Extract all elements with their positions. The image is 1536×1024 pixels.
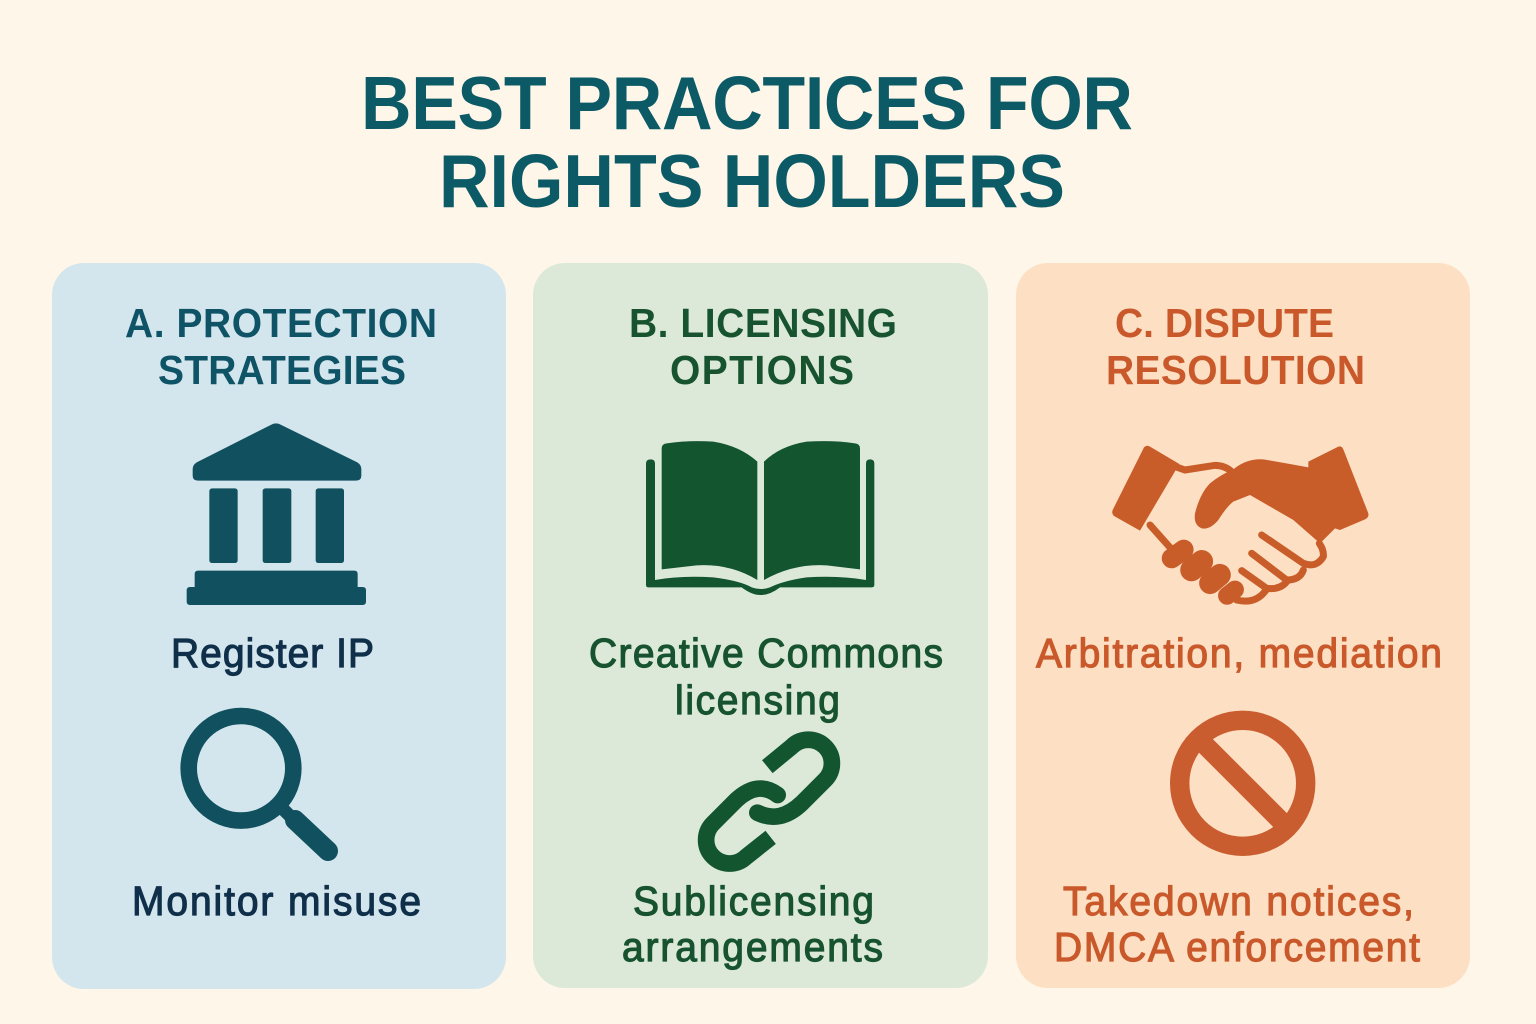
text: creative commons licensing [589, 631, 943, 723]
text: arbitration, mediation: Arbitration, mediation [1036, 631, 1442, 676]
panel: protection strategies [52, 263, 506, 989]
panel: dispute resolution [1016, 263, 1470, 988]
icon: magnifying glass [189, 716, 328, 851]
title [361, 62, 1133, 224]
text: monitor misuse: Monitor misuse [132, 879, 421, 924]
heading: dispute resolution: C. DISPUTE [1115, 301, 1334, 346]
icon: institution building [187, 423, 366, 605]
text: creative commons licensing: Creative Commons [589, 631, 943, 676]
text: creative commons licensing: licensing [675, 678, 840, 723]
heading: dispute resolution [1106, 301, 1365, 393]
heading: dispute resolution: RESOLUTION [1106, 348, 1365, 393]
text: sublicensing arrangements: arrangements [622, 925, 883, 970]
heading: protection strategies: STRATEGIES [158, 348, 406, 393]
icon: handshake [1112, 446, 1369, 608]
title: BEST PRACTICES FOR [361, 62, 1133, 146]
heading: licensing options: B. LICENSING [629, 301, 897, 346]
text: sublicensing arrangements [622, 879, 883, 970]
panel: licensing options [533, 263, 988, 988]
icon: prohibited sign [1180, 720, 1306, 846]
text: sublicensing arrangements: Sublicensing [633, 879, 874, 924]
icon: open book [646, 441, 874, 595]
text: takedown notices, DMCA enforcement [1054, 879, 1420, 970]
text: takedown notices, DMCA enforcement: DMCA enforcement [1054, 925, 1420, 970]
heading: licensing options [629, 301, 897, 393]
heading: protection strategies [125, 301, 437, 393]
heading: protection strategies: A. PROTECTION [125, 301, 437, 346]
heading: licensing options: OPTIONS [670, 348, 854, 393]
text: takedown notices, DMCA enforcement: Takedown notices, [1063, 879, 1414, 924]
icon: chain link [706, 740, 832, 864]
text: register IP: Register IP [171, 631, 374, 676]
title: RIGHTS HOLDERS [439, 140, 1065, 224]
